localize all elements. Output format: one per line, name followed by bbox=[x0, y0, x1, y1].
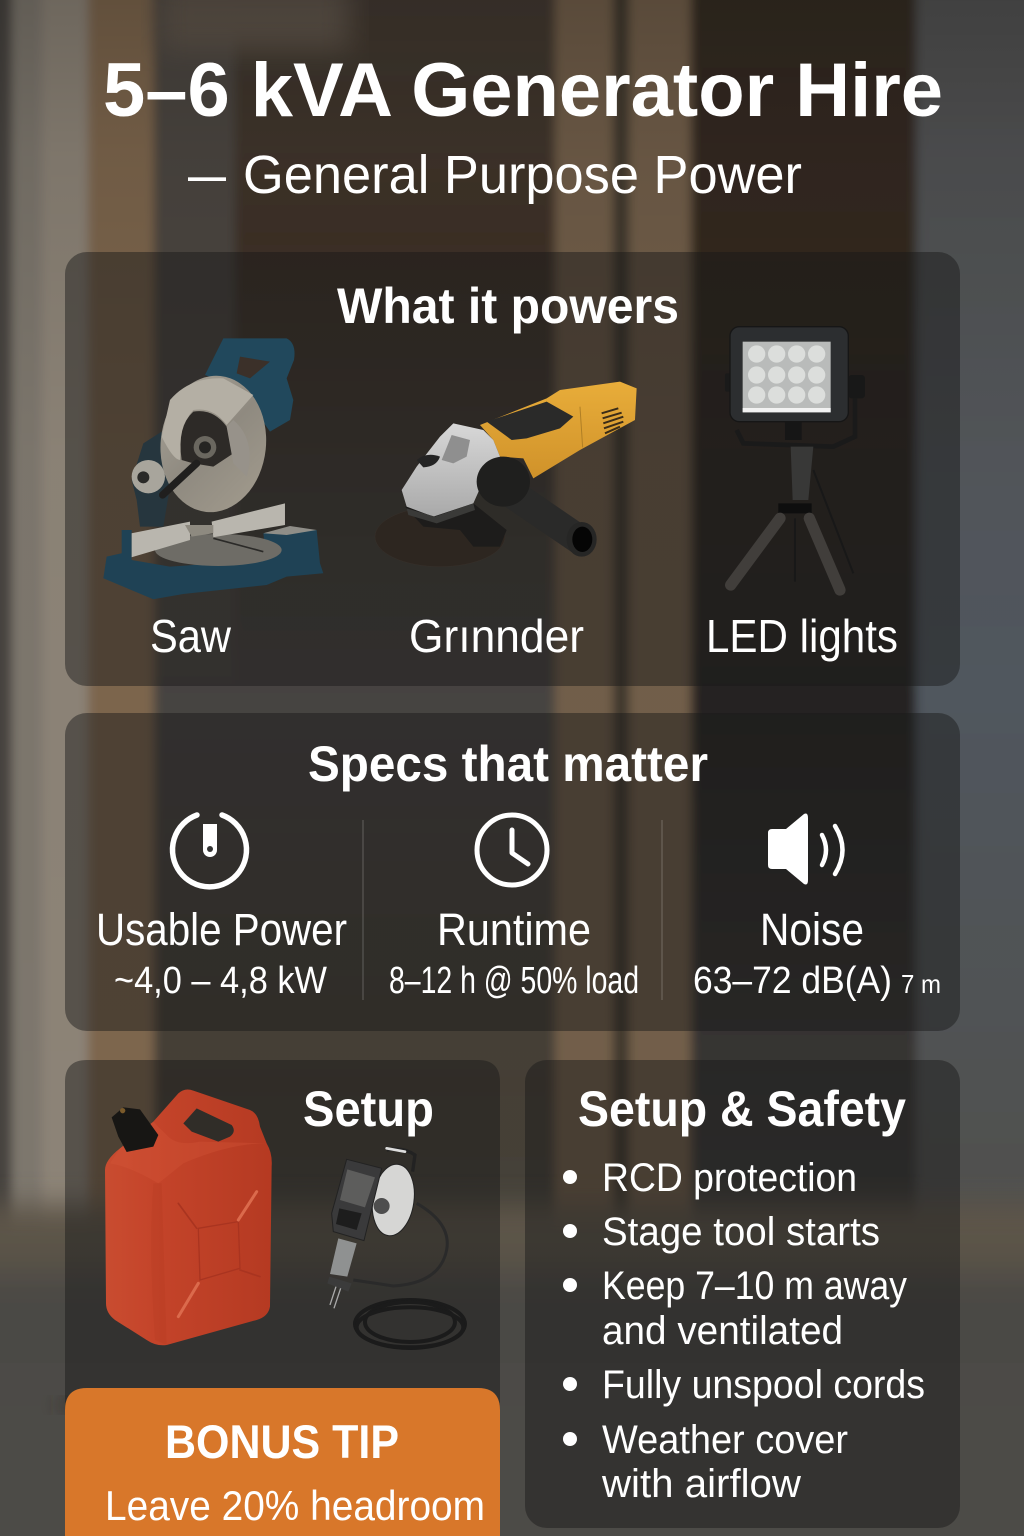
callout text: Leave 20% headroom bbox=[105, 1482, 485, 1529]
checklist: Weather cover bbox=[602, 1418, 848, 1462]
label: LED lights: LED lights bbox=[706, 610, 898, 662]
checklist: RCD protection bbox=[602, 1156, 857, 1200]
label: noise: Noise bbox=[760, 904, 864, 955]
icon: red fuel can bbox=[105, 1089, 272, 1345]
value: usable power: ~4,0 – 4,8 kW bbox=[114, 960, 327, 1002]
value: runtime: 8–12 h @ 50% load bbox=[389, 960, 639, 1002]
icon: mitre saw bbox=[103, 338, 323, 599]
heading: setup and safety: Setup & Safety bbox=[578, 1081, 906, 1137]
checklist: Fully unspool cords bbox=[602, 1363, 925, 1407]
heading: what it powers: What it powers bbox=[337, 278, 679, 334]
value: noise: 7 m bbox=[901, 969, 941, 999]
value: noise: 63–72 dB(A) bbox=[693, 960, 892, 1002]
panel: what it powers bbox=[65, 252, 960, 686]
spec: noise bbox=[693, 814, 941, 1002]
checklist: Stage tool starts bbox=[602, 1210, 880, 1254]
checklist: and ventilated bbox=[602, 1309, 843, 1353]
spec: runtime bbox=[389, 815, 639, 1002]
checklist: with airflow bbox=[601, 1462, 801, 1506]
callout heading: BONUS TIP bbox=[165, 1415, 399, 1468]
title: 5–6 kVA Generator Hire bbox=[103, 48, 943, 133]
icon: LED work light bbox=[725, 327, 865, 590]
subtitle: General Purpose Power bbox=[243, 145, 802, 205]
icon: RCD plug and cord bbox=[327, 1148, 465, 1348]
spec: usable power bbox=[96, 815, 347, 1002]
panel: setup and safety bbox=[525, 1060, 960, 1528]
icon: clock bbox=[477, 815, 547, 885]
subtitle: — bbox=[188, 145, 226, 205]
label: grinder: Grınnder bbox=[409, 610, 584, 662]
callout: bonus tip bbox=[65, 1388, 500, 1536]
icon: speaker bbox=[768, 814, 842, 884]
label: usable power: Usable Power bbox=[96, 904, 347, 955]
checklist bbox=[563, 1156, 925, 1506]
label: runtime: Runtime bbox=[437, 904, 591, 955]
panel: specs that matter bbox=[65, 713, 960, 1031]
heading: setup: Setup bbox=[303, 1081, 434, 1137]
label: saw: Saw bbox=[150, 610, 232, 662]
panel: setup bbox=[65, 1060, 500, 1536]
heading: specs that matter: Specs that matter bbox=[308, 736, 708, 792]
checklist: Keep 7–10 m away bbox=[602, 1264, 907, 1308]
icon: angle grinder bbox=[375, 382, 637, 567]
icon: power bbox=[173, 815, 247, 887]
